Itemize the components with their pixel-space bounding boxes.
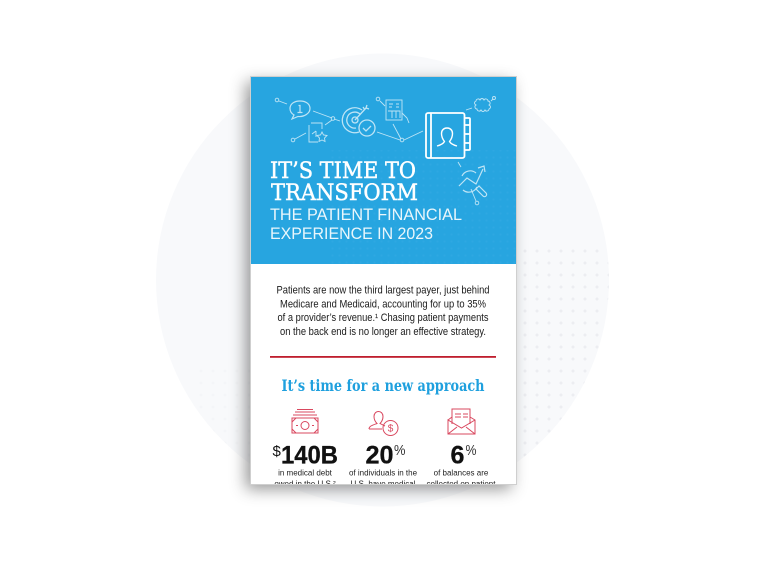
stat column: 6%: [427, 409, 496, 488]
intro paragraph: Patients are now the third largest payer, just behind: [276, 284, 490, 296]
document card: [250, 76, 516, 488]
stat value: 6: [450, 442, 464, 470]
title: IT’S TIME TO: [270, 159, 416, 184]
title: TRANSFORM: [271, 181, 418, 206]
stat value: [272, 445, 337, 464]
stat description: [349, 470, 417, 484]
icon: document with star: [309, 123, 327, 142]
intro paragraph: of a provider’s revenue.¹ Chasing patient payments: [278, 312, 488, 324]
icon: star node: [474, 98, 490, 112]
title: [270, 161, 418, 200]
icon: info bubble: [290, 101, 310, 119]
stat description: owed in the U.S.²: [274, 480, 336, 488]
stat value: [451, 445, 476, 464]
subtitle: EXPERIENCE IN 2023: [270, 224, 433, 243]
stat value: [366, 445, 405, 464]
header line icons: [275, 96, 496, 205]
infographic thumbnail scene: [200, 66, 609, 505]
stat description: of balances are: [434, 468, 489, 478]
section heading: It’s time for a new approach: [282, 376, 484, 395]
stat column: 20%: [349, 412, 418, 488]
icon: money stack: [292, 410, 318, 433]
red divider: [270, 356, 496, 358]
intro paragraph: on the back end is no longer an effective strategy.: [280, 326, 486, 338]
subtitle: [270, 208, 462, 239]
intro paragraph: [276, 284, 490, 338]
icon: envelope with invoice: [448, 409, 475, 434]
icon: address book: [426, 113, 470, 158]
intro paragraph: Medicare and Medicaid, accounting for up to 35%: [280, 298, 487, 310]
stat value: %: [466, 443, 477, 459]
card edge: [250, 76, 516, 484]
network lines: [275, 96, 496, 205]
stat description: [274, 470, 336, 484]
stat description: [426, 470, 496, 484]
stat description: in medical debt: [278, 468, 333, 478]
blue header panel: [251, 77, 516, 264]
stat description: collected on patient: [427, 480, 496, 488]
subtitle: THE PATIENT FINANCIAL: [270, 205, 462, 224]
stat value: 140B: [281, 442, 338, 470]
stat value: %: [394, 443, 406, 459]
stat value: 20: [366, 442, 394, 470]
background circle with dots: [200, 250, 609, 456]
stat column: 20%: $: [388, 424, 394, 434]
icon: chart magnifier: [459, 166, 487, 197]
icon: person with dollar: [369, 412, 398, 436]
stat description: of individuals in the: [349, 468, 418, 478]
stat value: $: [272, 443, 282, 460]
stat column: $140B: [272, 410, 338, 488]
icon: target with check: [342, 105, 375, 136]
icon: form with hand: [386, 100, 409, 123]
stat description: U.S. have medical: [351, 480, 416, 488]
